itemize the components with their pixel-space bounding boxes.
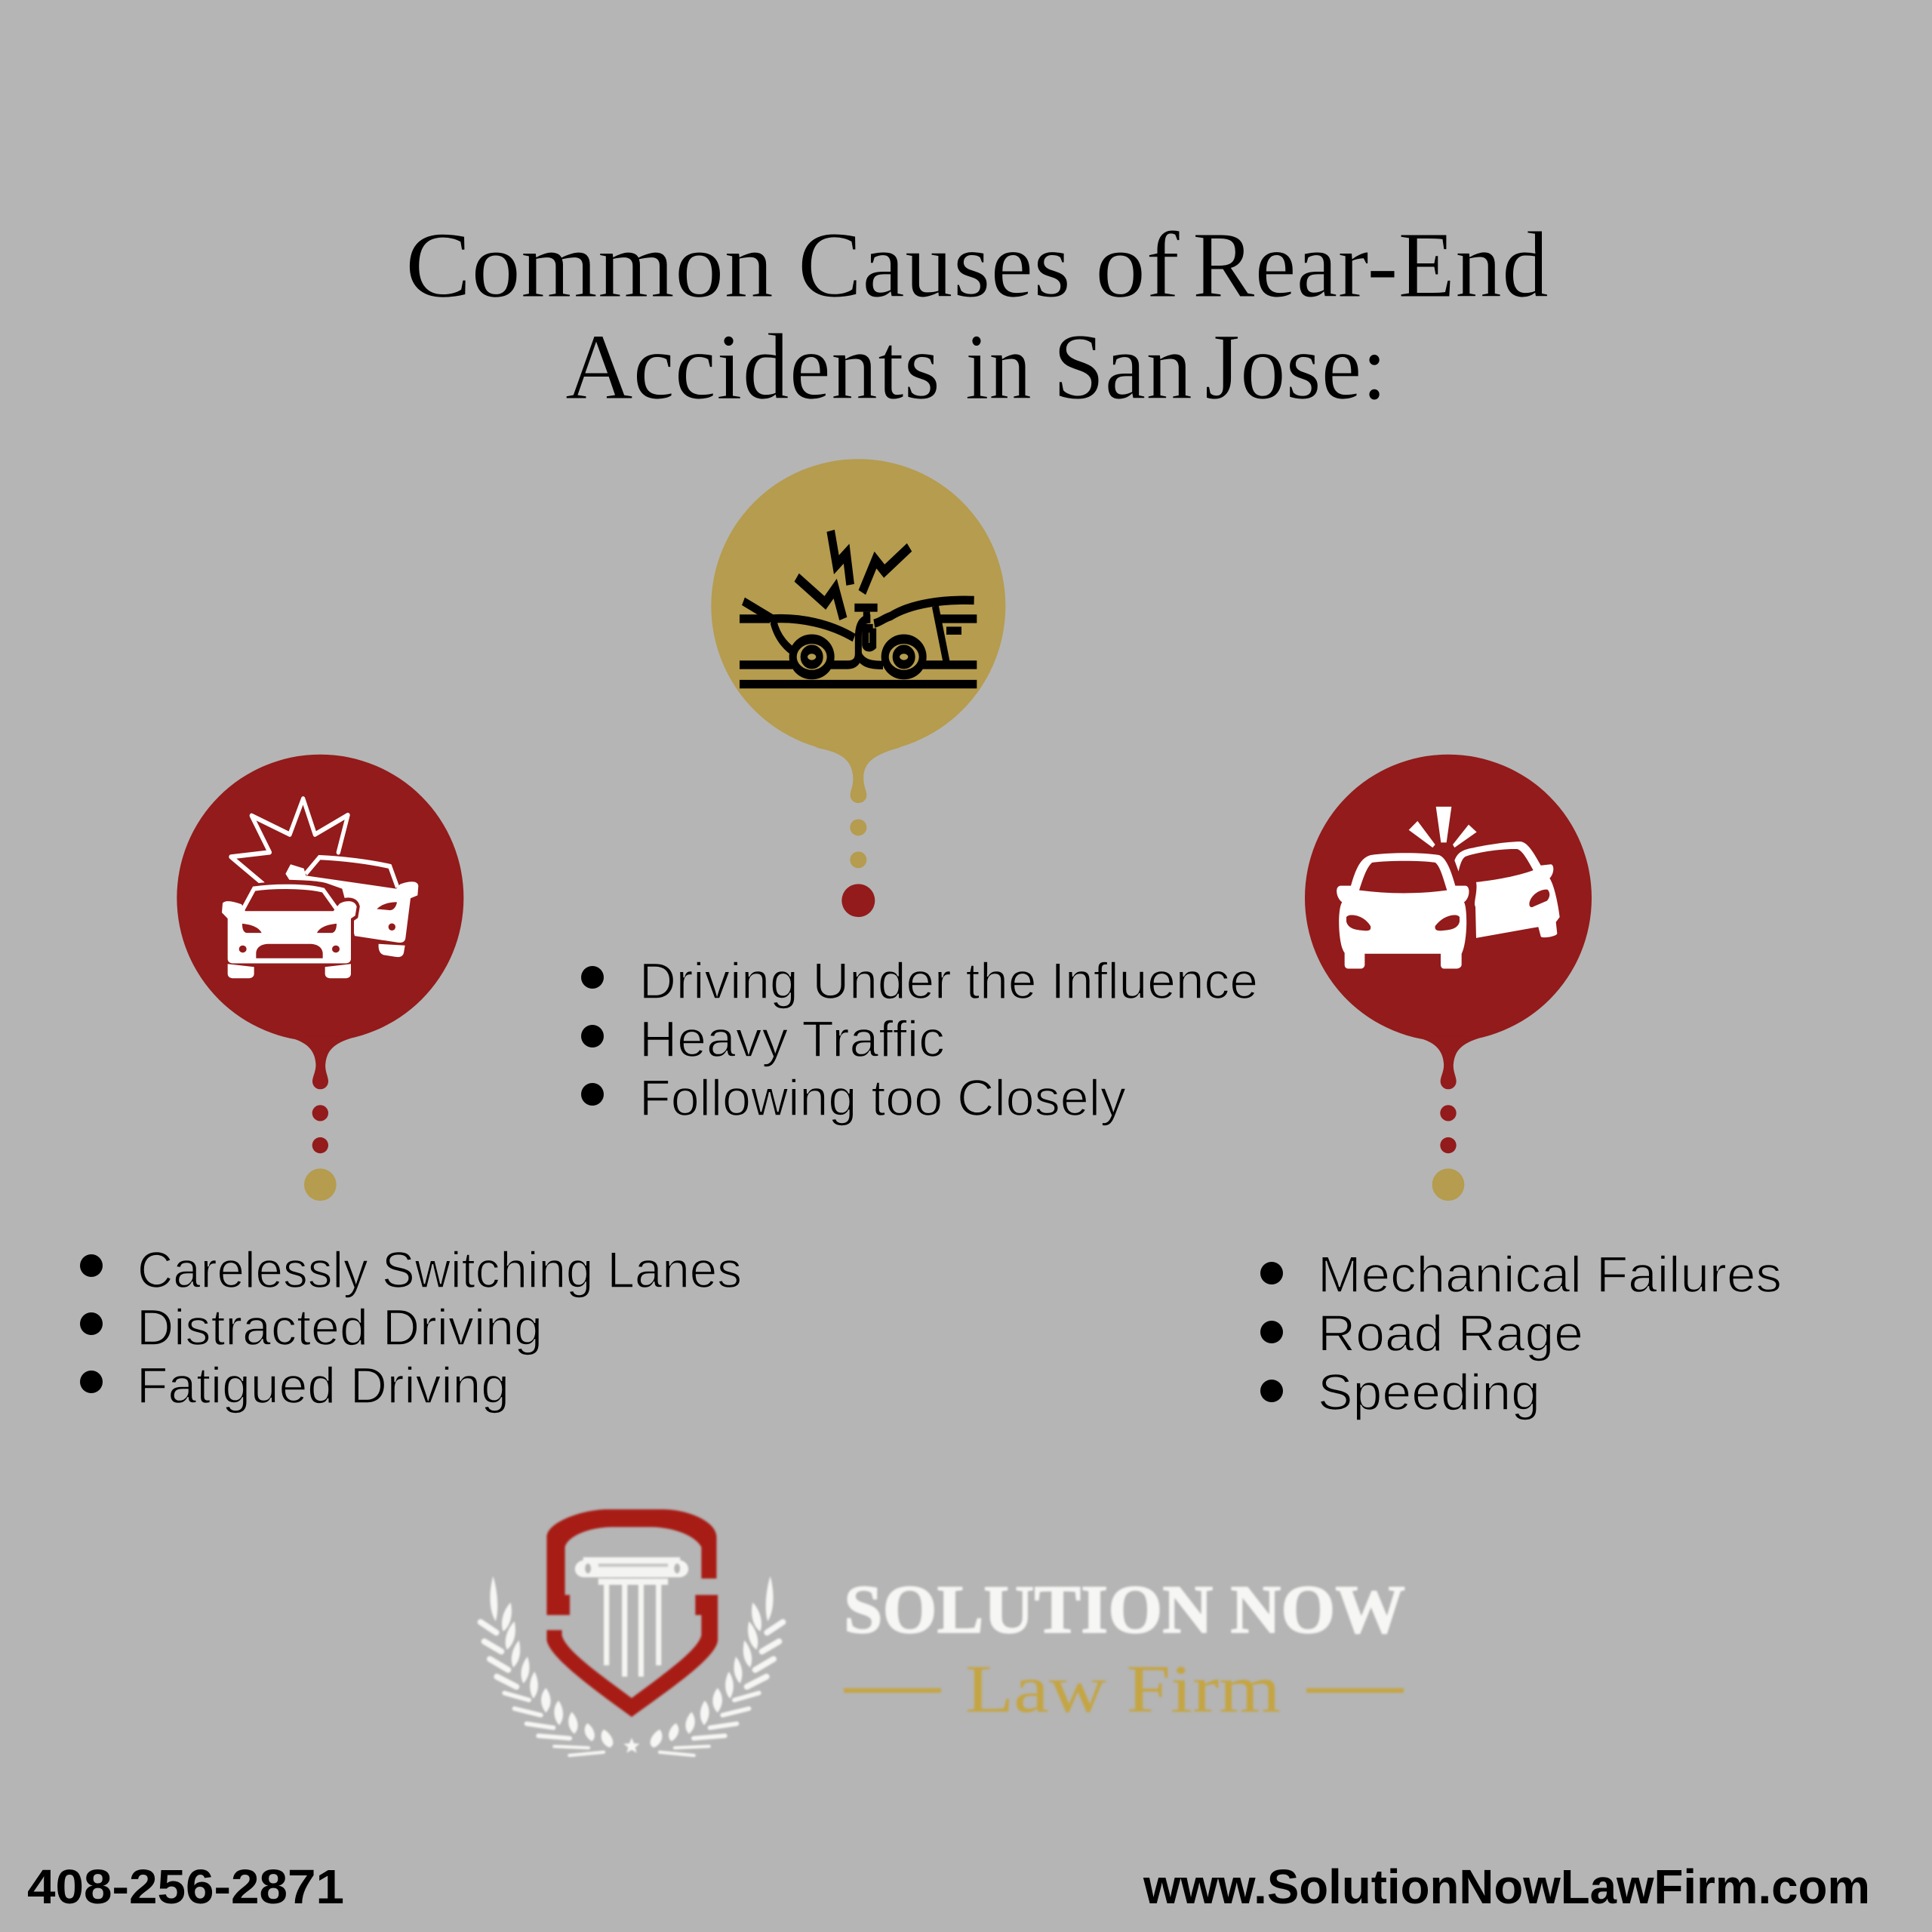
red dot bbox=[841, 884, 875, 917]
list: center causes: Heavy Traffic bbox=[639, 1011, 945, 1068]
phone number: 408-256-2871 bbox=[27, 1860, 344, 1914]
icon: two cars with burst bbox=[222, 798, 418, 978]
title: Accidents bbox=[565, 315, 940, 420]
gold circle with drip bbox=[711, 459, 1005, 868]
shield and column bbox=[546, 1509, 718, 1717]
title: Common bbox=[405, 214, 774, 318]
list: right causes: Speeding bbox=[1318, 1364, 1540, 1421]
title: San bbox=[1053, 315, 1192, 420]
icon: crashed cars bbox=[740, 531, 977, 685]
list: left causes: Fatigued Driving bbox=[137, 1357, 509, 1414]
list: left causes: Distracted Driving bbox=[137, 1299, 543, 1356]
list: right causes bbox=[1260, 1246, 1782, 1421]
title: Rear-End bbox=[1192, 214, 1549, 318]
logo subtitle: Law Firm bbox=[965, 1652, 1281, 1727]
website: www.SolutionNowLawFirm.com bbox=[1143, 1860, 1870, 1914]
list: right causes: Mechanical Failures bbox=[1318, 1246, 1782, 1303]
list: center causes: Following too Closely bbox=[639, 1069, 1126, 1127]
title: in bbox=[965, 315, 1032, 420]
laurel bbox=[481, 1576, 783, 1755]
list: center causes: Driving Under the Influence bbox=[639, 952, 1258, 1010]
logo subtitle bbox=[844, 1652, 1404, 1727]
panel: center pin bbox=[711, 459, 1005, 917]
logo name: SOLUTION NOW bbox=[844, 1571, 1405, 1647]
gold dot bbox=[304, 1168, 337, 1201]
title: Causes bbox=[798, 214, 1071, 318]
panel: left pin bbox=[177, 755, 463, 1201]
list: center causes bbox=[581, 952, 1258, 1127]
title bbox=[405, 214, 1549, 420]
logo emblem bbox=[481, 1509, 783, 1755]
logo bbox=[481, 1509, 1405, 1755]
gold dot bbox=[1432, 1168, 1464, 1201]
red circle with drip bbox=[1305, 755, 1592, 1153]
panel: right pin bbox=[1305, 755, 1592, 1201]
list: left causes: Carelessly Switching Lanes bbox=[137, 1241, 742, 1299]
icon: side collision bbox=[1337, 807, 1560, 969]
list: left causes bbox=[80, 1241, 742, 1414]
title: Jose: bbox=[1204, 315, 1387, 420]
title: of bbox=[1095, 214, 1180, 318]
red circle with drip bbox=[177, 755, 463, 1153]
list: right causes: Road Rage bbox=[1318, 1305, 1583, 1362]
